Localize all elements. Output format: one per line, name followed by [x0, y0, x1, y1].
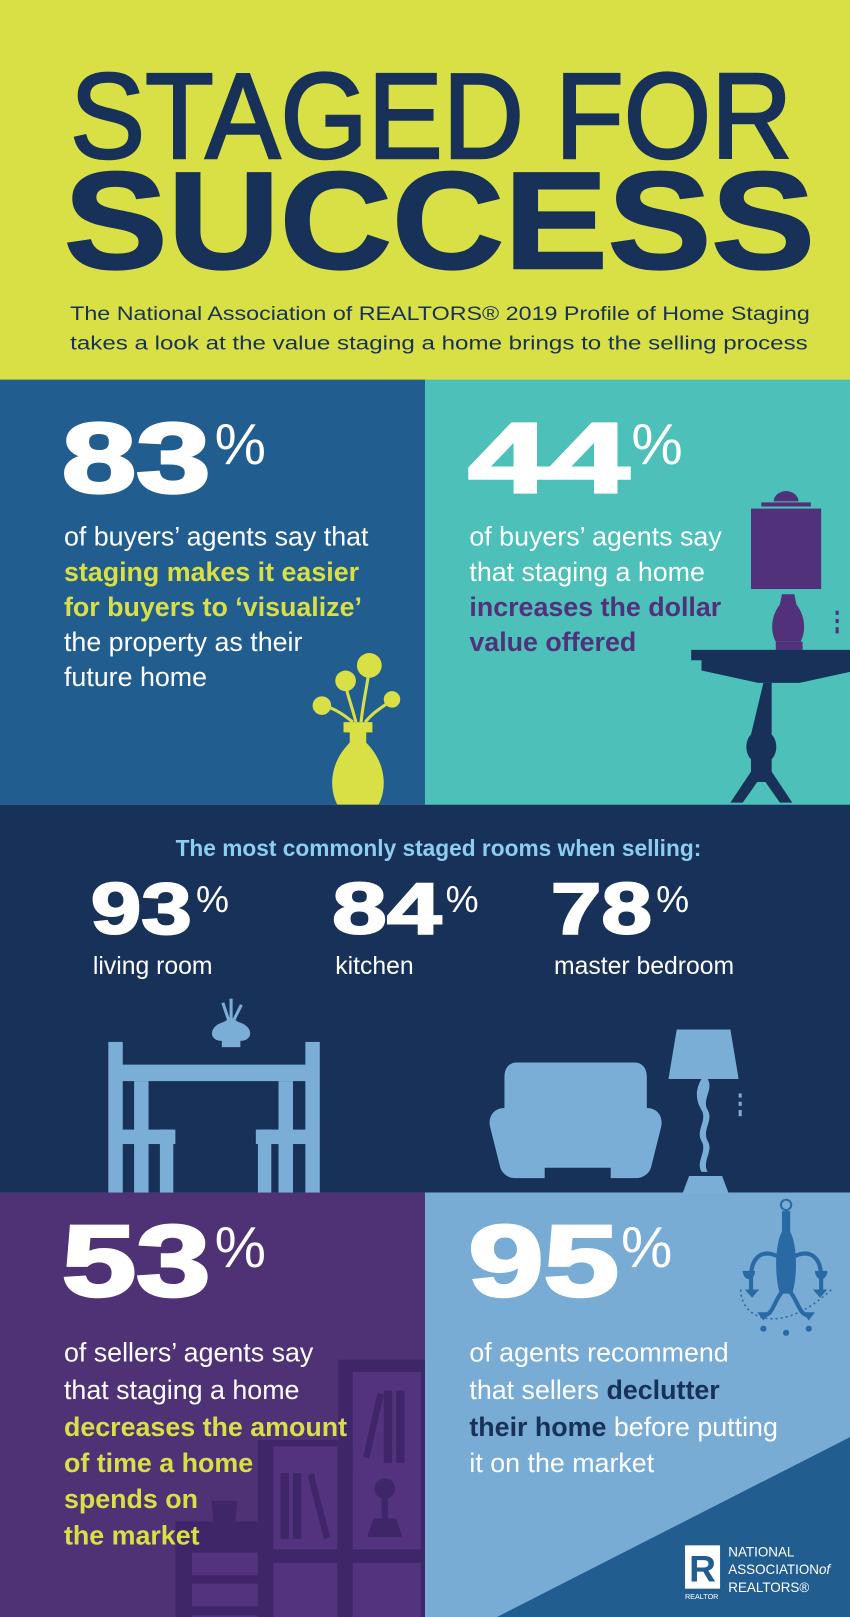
- text block: spends on: [64, 1484, 198, 1514]
- text block: value offered: [469, 627, 636, 657]
- logo: NAR: R: [689, 1547, 716, 1589]
- text block: future home: [64, 662, 207, 692]
- logo: NAR: [685, 1545, 831, 1601]
- heading: The most commonly staged rooms when selling:: [176, 835, 701, 861]
- panel: 44%: [425, 380, 850, 805]
- panel: 83%: [0, 380, 425, 805]
- icon: armchair and floor lamp: [490, 1030, 742, 1193]
- text block: of buyers’ agents say: [469, 522, 722, 552]
- logo: NAR: REALTOR: [685, 1592, 718, 1601]
- text block: of agents recommend: [469, 1338, 729, 1368]
- text block: it on the market: [469, 1448, 655, 1478]
- stat: 93% living room: %: [196, 878, 229, 920]
- stat 95: 95: [468, 1205, 619, 1318]
- stat: 78% master bedroom: %: [656, 878, 689, 920]
- panel: 53%: [0, 1193, 425, 1617]
- subtitle: takes a look at the value staging a home brings to the selling process: [70, 333, 808, 355]
- stat: 84% kitchen: 84: [332, 870, 442, 950]
- text block: that sellers declutter: [469, 1375, 720, 1405]
- stat 83: %: [215, 413, 266, 477]
- text block: the market: [64, 1520, 200, 1550]
- stat 44: 44: [468, 402, 629, 513]
- panel: 95%: [425, 1193, 850, 1617]
- stat 53: [62, 1205, 266, 1318]
- title line 1: STAGED FOR: [70, 48, 792, 184]
- text block: [469, 1338, 778, 1478]
- stat: 93% living room: living room: [93, 953, 213, 980]
- stat: 84% kitchen: %: [446, 878, 479, 920]
- text block: their home before putting: [469, 1412, 778, 1442]
- stat: 84% kitchen: kitchen: [335, 953, 414, 980]
- stat 95: %: [621, 1216, 672, 1280]
- stat: 78% master bedroom: [551, 870, 734, 980]
- header panel: [0, 0, 850, 382]
- stat: 93% living room: [91, 870, 229, 980]
- text block: of time a home: [64, 1448, 253, 1478]
- text block: of buyers’ agents say that: [64, 522, 369, 552]
- text block: [64, 522, 369, 692]
- stat 44: %: [631, 413, 683, 477]
- stat: 93% living room: 93: [91, 870, 192, 950]
- icon: chandelier: [741, 1200, 831, 1336]
- stat: 78% master bedroom: master bedroom: [554, 953, 734, 980]
- text block: decreases the amount: [64, 1412, 347, 1442]
- text block: staging makes it easier: [64, 557, 360, 587]
- subtitle: [70, 303, 810, 355]
- text block: [469, 522, 722, 657]
- text block: increases the dollar: [469, 592, 722, 622]
- panel: commonly staged rooms: [0, 805, 850, 1193]
- text block: [64, 1338, 347, 1550]
- icon: bookshelf: [175, 1360, 425, 1617]
- text block: that staging a home: [64, 1375, 299, 1405]
- logo: NAR: REALTORS®: [728, 1580, 809, 1595]
- stat: 84% kitchen: [332, 870, 479, 980]
- stat: 78% master bedroom: 78: [551, 870, 652, 950]
- logo: NAR: ASSOCIATIONof: [728, 1562, 831, 1577]
- stat 83: 83: [62, 402, 210, 513]
- stat 44: [468, 402, 683, 513]
- logo: NAR: NATIONAL: [728, 1545, 795, 1560]
- icon: vase with flowers: [313, 653, 400, 805]
- stat 95: [468, 1205, 672, 1318]
- stat 53: 53: [62, 1205, 210, 1318]
- icon: dining table with chairs: [108, 999, 320, 1193]
- text block: the property as their: [64, 627, 302, 657]
- icon: table lamp and side table: [691, 491, 850, 803]
- text block: for buyers to ‘visualize’: [64, 592, 362, 622]
- subtitle: The National Association of REALTORS® 2019 Profile of Home Staging: [70, 303, 810, 325]
- stat 53: %: [215, 1216, 266, 1280]
- title line 2: SUCCESS: [64, 144, 815, 298]
- text block: that staging a home: [469, 557, 705, 587]
- stat 83: [62, 402, 266, 513]
- text block: of sellers’ agents say: [64, 1338, 314, 1368]
